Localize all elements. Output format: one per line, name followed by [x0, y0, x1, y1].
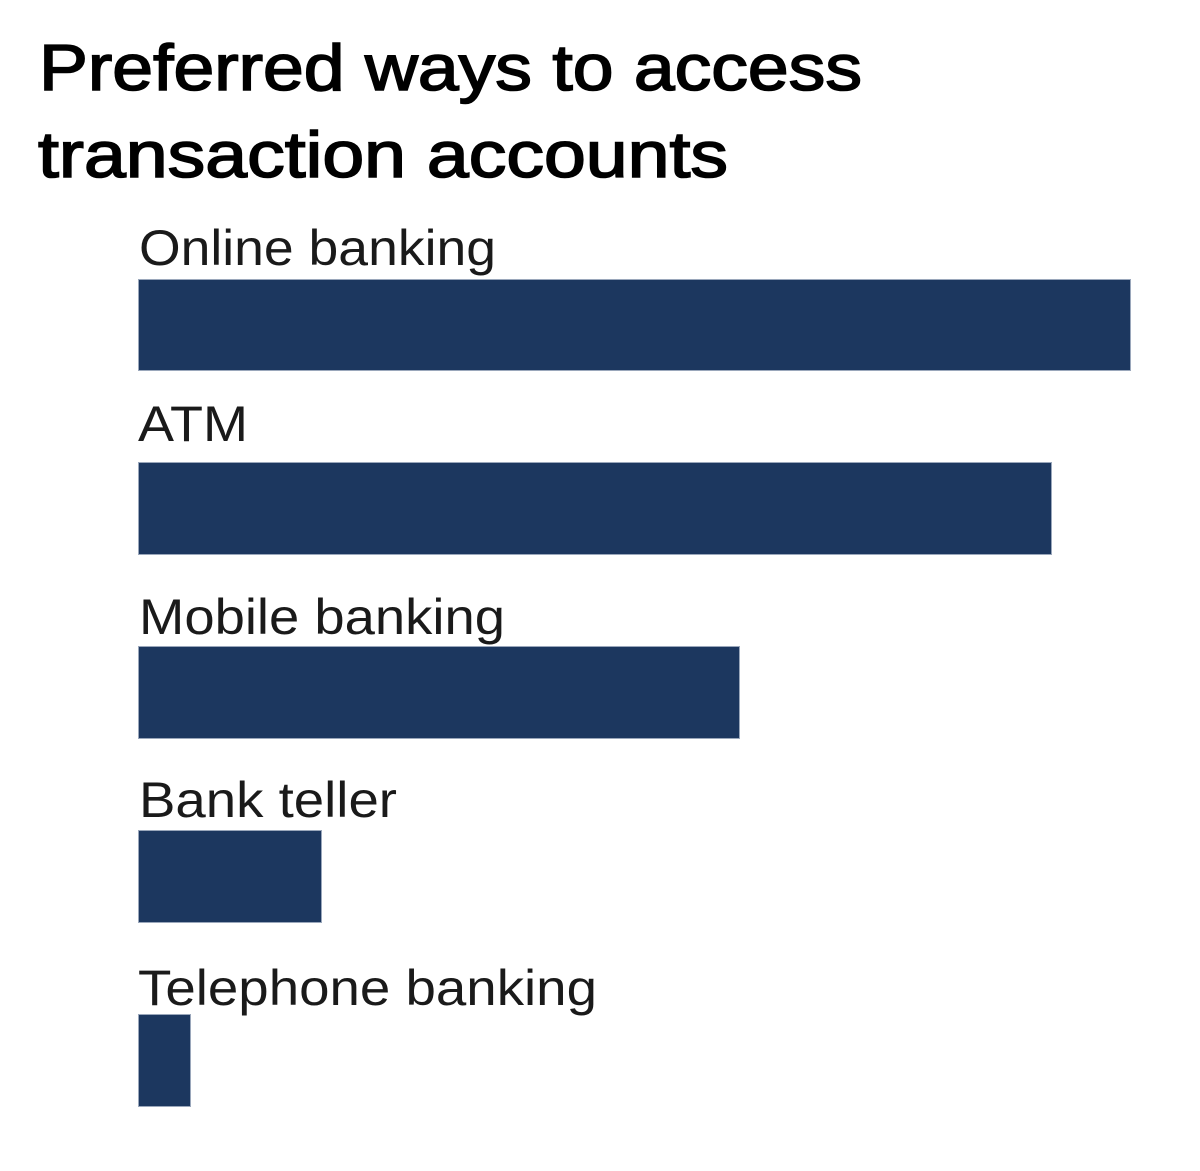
label: Mobile banking: Mobile banking: [139, 589, 505, 645]
title: Preferred ways to access: [39, 31, 862, 104]
bar: ATM: [138, 462, 1052, 554]
label: ATM: ATM: [138, 396, 248, 452]
bar: Online banking: [138, 280, 1130, 370]
bar: Bank teller: [138, 830, 322, 922]
bar chart: [138, 220, 1130, 1106]
label: Online banking: Online banking: [139, 220, 496, 276]
title: [38, 31, 862, 191]
title: transaction accounts: [38, 118, 728, 191]
label: Bank teller: Bank teller: [139, 772, 397, 828]
bar: Mobile banking: [138, 646, 740, 738]
bar: Telephone banking: [138, 1014, 190, 1106]
label: Telephone banking: Telephone banking: [138, 960, 597, 1016]
